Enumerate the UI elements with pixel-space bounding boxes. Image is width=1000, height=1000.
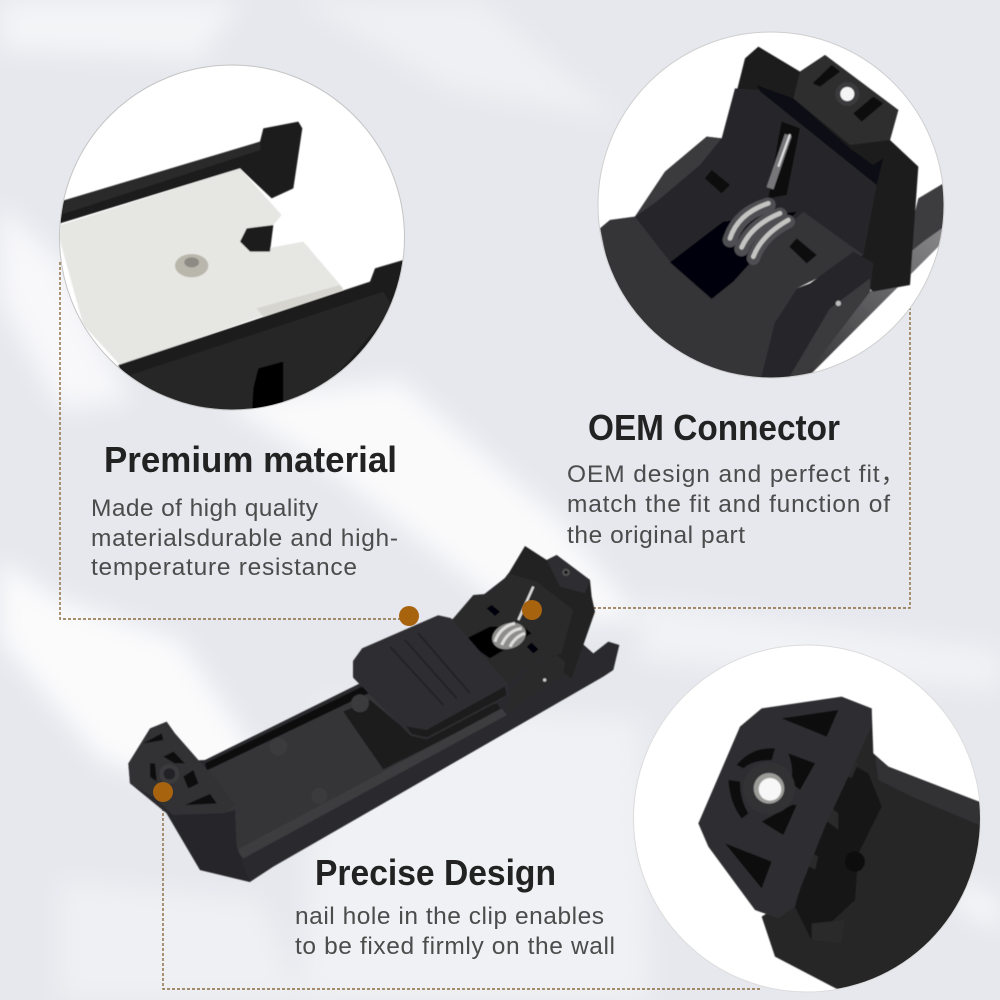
- text: premium material description: Made of high quality: [91, 495, 319, 522]
- text: precise design description: [295, 903, 615, 960]
- text: OEM connector description: the original part: [567, 522, 745, 549]
- marker dot: OEM connector: [522, 600, 542, 620]
- circle: OEM connector close-up: [598, 32, 947, 382]
- plate surface: [207, 693, 507, 858]
- dotted connector: premium material: [60, 262, 408, 619]
- shadow under clip: [343, 700, 502, 769]
- text: premium material description: materialsdurable and high-: [91, 525, 398, 552]
- marker dot: precise design: [153, 782, 173, 802]
- dotted connector: precise design: [163, 793, 761, 989]
- text: OEM connector description: OEM design and perfect fit，: [567, 461, 905, 488]
- main product: clip: [128, 546, 619, 882]
- end cap: [128, 722, 235, 815]
- heading: Premium material: Premium material: [104, 439, 397, 480]
- text: OEM connector description: [567, 461, 905, 549]
- foot: [167, 810, 250, 882]
- dotted connector: OEM connector: [533, 308, 910, 608]
- groove: [205, 686, 368, 771]
- plate bumps: [269, 694, 369, 804]
- spring: [488, 618, 530, 654]
- text: premium material description: [91, 495, 398, 581]
- circle: precise design close-up: [634, 645, 983, 997]
- side ear: [507, 655, 565, 713]
- text: premium material description: temperature resistance: [91, 554, 357, 581]
- connector back: [507, 546, 595, 678]
- heading: OEM Connector: OEM Connector: [588, 407, 840, 448]
- text: precise design description: nail hole in the clip enables: [295, 903, 604, 930]
- text: precise design description: to be fixed firmly on the wall: [295, 933, 615, 960]
- text: OEM connector description: match the fit and function of: [567, 491, 890, 518]
- heading: Precise Design: Precise Design: [315, 852, 556, 893]
- circle: premium material close-up: [59, 64, 405, 410]
- back plate: [128, 577, 619, 882]
- lower rail: [237, 708, 507, 858]
- paddle: [355, 617, 507, 737]
- marker dot: premium material: [399, 606, 419, 626]
- lever: [453, 573, 573, 687]
